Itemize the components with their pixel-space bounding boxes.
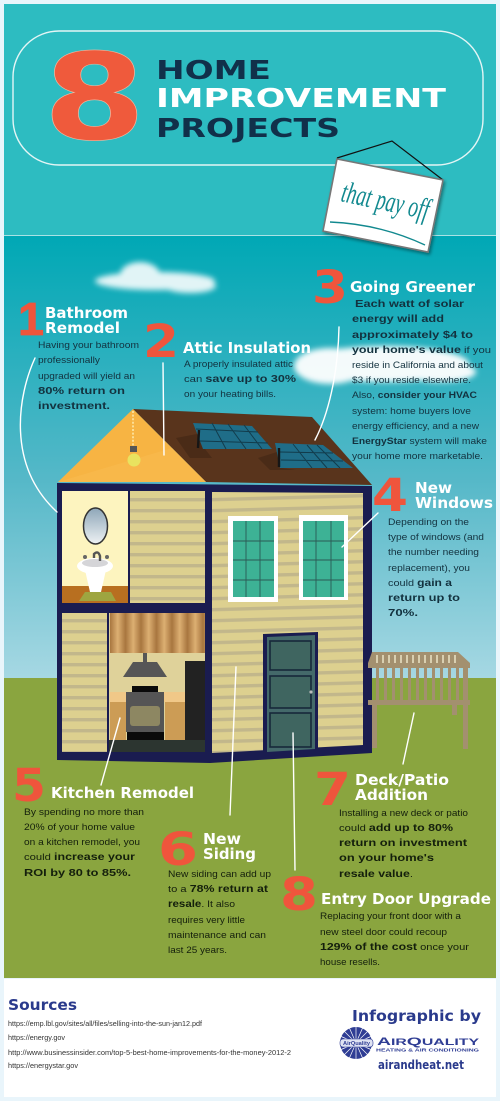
item 8: entry door upgrade: house resells. [320, 957, 380, 968]
header panel [4, 4, 496, 236]
cloud left [95, 262, 216, 293]
item 7: deck/patio addition: Addition [355, 786, 428, 804]
item 6: new siding: resale . It also [168, 898, 235, 910]
item 2: attic insulation: on your heating bills. [184, 389, 276, 400]
solar panel left [176, 423, 272, 458]
item 7: deck/patio addition: 7 [314, 763, 351, 816]
item 4: new windows: Windows [415, 494, 493, 512]
item 4: new windows: 70%. [388, 607, 418, 619]
title text: IMPROVEMENT [156, 84, 446, 114]
item 8: entry door upgrade: 8 [280, 868, 318, 921]
item 7: deck/patio addition [314, 763, 468, 880]
mirror [84, 508, 108, 544]
item 1: bathroom remodel: Remodel [45, 319, 120, 337]
item 5: kitchen remodel: could increase your [24, 851, 135, 863]
item 7: deck/patio addition: on your home's [339, 852, 434, 864]
item 4: new windows [372, 469, 493, 619]
item 6: new siding: to a 78% return at [168, 883, 269, 895]
item 3: going greener: approximately $4 to [352, 329, 473, 341]
credit [339, 1007, 481, 1072]
item 3: going greener: 3 [312, 261, 348, 314]
item 5: kitchen remodel: on a kitchen remodel, you [24, 837, 140, 848]
item 3: going greener: Also, consider your HVAC [352, 390, 477, 401]
item 1: bathroom remodel [18, 293, 139, 412]
big number 8: 8 [43, 29, 146, 168]
item 3: going greener: system: home buyers love [352, 406, 471, 417]
sources: https://energy.gov [8, 1033, 65, 1042]
item 4: new windows: could gain a [388, 577, 452, 589]
item 6: new siding: last 25 years. [168, 945, 227, 956]
ground [4, 678, 496, 978]
item 5: kitchen remodel: By spending no more than [24, 807, 144, 818]
item 3: going greener: energy will add [352, 313, 444, 325]
item 4: new windows: New [415, 479, 452, 497]
sources: https://energystar.gov [8, 1061, 78, 1070]
sky [4, 236, 496, 678]
item 1: bathroom remodel: Having your bathroom [38, 340, 139, 351]
item 8: entry door upgrade: Entry Door Upgrade [321, 890, 491, 908]
cabinets [110, 613, 205, 653]
stove [126, 686, 164, 741]
item 7: deck/patio addition: Deck/Patio [355, 771, 449, 789]
item 3: going greener: your home more marketable. [352, 451, 483, 462]
credit: airandheat.net [378, 1058, 464, 1072]
item 8: entry door upgrade: 129% of the cost once your [320, 941, 469, 953]
item 2: attic insulation: Attic Insulation [183, 339, 311, 357]
item 2: attic insulation: can save up to 30% [184, 373, 297, 385]
item 3: going greener: $3 if you reside elsewhere. [352, 375, 471, 386]
counter [110, 692, 185, 702]
item 6: new siding: Siding [203, 845, 256, 863]
sources: https://emp.lbl.gov/sites/all/files/selling-into-the-sun-jan12.pdf [8, 1019, 203, 1028]
item 3: going greener: Each watt of solar [355, 298, 464, 310]
footer panel [4, 979, 496, 1097]
item 6: new siding: New [203, 830, 241, 848]
item 1: bathroom remodel: Bathroom [45, 304, 128, 322]
item 1: bathroom remodel: 1 [18, 293, 44, 345]
item 2: attic insulation: A properly insulated attic [184, 359, 293, 370]
item 6: new siding: maintenance and can [168, 930, 266, 941]
hanging sign: that pay off [339, 176, 435, 227]
item 3: going greener [312, 261, 491, 462]
bathroom [62, 491, 128, 603]
house frame [57, 483, 372, 763]
logo starburst [339, 1026, 373, 1060]
item 6: new siding: 6 [158, 823, 198, 876]
solar panel right [258, 443, 353, 470]
item 6: new siding: New siding can add up [168, 869, 271, 880]
house [57, 409, 470, 763]
item 3: going greener: energy efficiency, and a new [352, 421, 479, 432]
item 7: deck/patio addition: Installing a new deck or patio [339, 808, 468, 819]
credit: Infographic by [352, 1007, 481, 1025]
kitchen [109, 613, 205, 752]
deck [368, 652, 470, 749]
item 6: new siding [158, 823, 271, 956]
title outline [13, 31, 483, 165]
siding lower left [62, 613, 107, 752]
range hood [123, 653, 167, 677]
hanging sign [323, 141, 443, 252]
fridge [185, 661, 205, 740]
item 4: new windows: return up to [388, 592, 460, 604]
item 5: kitchen remodel [12, 759, 194, 879]
cloud right [294, 346, 476, 384]
item 8: entry door upgrade: new steel door could recoup [320, 927, 447, 938]
item 4: new windows: type of windows (and [388, 532, 484, 543]
item 1: bathroom remodel: 80% return on [38, 385, 125, 397]
attic light bulb [128, 411, 140, 466]
item 5: kitchen remodel: Kitchen Remodel [51, 784, 194, 802]
item 6: new siding: requires very little [168, 915, 245, 926]
item 4: new windows: Depending on the [388, 517, 469, 528]
item 4: new windows: 4 [372, 469, 408, 522]
logo starburst: AirQuality [343, 1041, 370, 1047]
item 1: bathroom remodel: upgraded will yield an [38, 371, 135, 382]
item 3: going greener: reside in California and about [352, 360, 483, 371]
item 8: entry door upgrade: Replacing your front door with a [320, 911, 462, 922]
item 3: going greener: EnergyStar system will make [352, 436, 487, 447]
leader lines [20, 327, 414, 870]
item 2: attic insulation [143, 315, 311, 400]
siding right [212, 492, 363, 753]
item 5: kitchen remodel: 5 [12, 759, 46, 812]
front door [263, 632, 318, 753]
item 1: bathroom remodel: investment. [38, 400, 110, 412]
item 4: new windows: replacement), you [388, 563, 470, 574]
item 1: bathroom remodel: professionally [38, 355, 100, 366]
item 5: kitchen remodel: ROI by 80 to 85%. [24, 867, 131, 879]
sink [77, 552, 113, 592]
item 7: deck/patio addition: return on investment [339, 837, 468, 849]
item 2: attic insulation: 2 [143, 315, 179, 368]
roof [133, 409, 372, 485]
item 5: kitchen remodel: 20% of your home value [24, 822, 135, 833]
sources: Sources [8, 996, 77, 1014]
item 3: going greener: Going Greener [350, 278, 475, 296]
item 7: deck/patio addition: could add up to 80% [339, 822, 454, 834]
title text [156, 56, 446, 144]
window right [299, 515, 348, 600]
attic [58, 409, 206, 482]
item 7: deck/patio addition: resale value . [339, 868, 413, 880]
sources: http://www.businessinsider.com/top-5-best-home-improvements-for-the-money-2012-2 [8, 1048, 291, 1057]
sources [8, 996, 291, 1070]
title text: HOME [156, 56, 271, 86]
item 8: entry door upgrade [280, 868, 491, 968]
siding upper left [130, 491, 205, 603]
credit: HEATING & AIR CONDITIONING [376, 1048, 480, 1052]
item 4: new windows: the number needing [388, 547, 479, 558]
item 3: going greener: your home's value if you [352, 344, 491, 356]
window left [228, 516, 278, 602]
logo wordmark: A IR Q UALITY [377, 1036, 479, 1048]
title text: PROJECTS [156, 114, 340, 144]
